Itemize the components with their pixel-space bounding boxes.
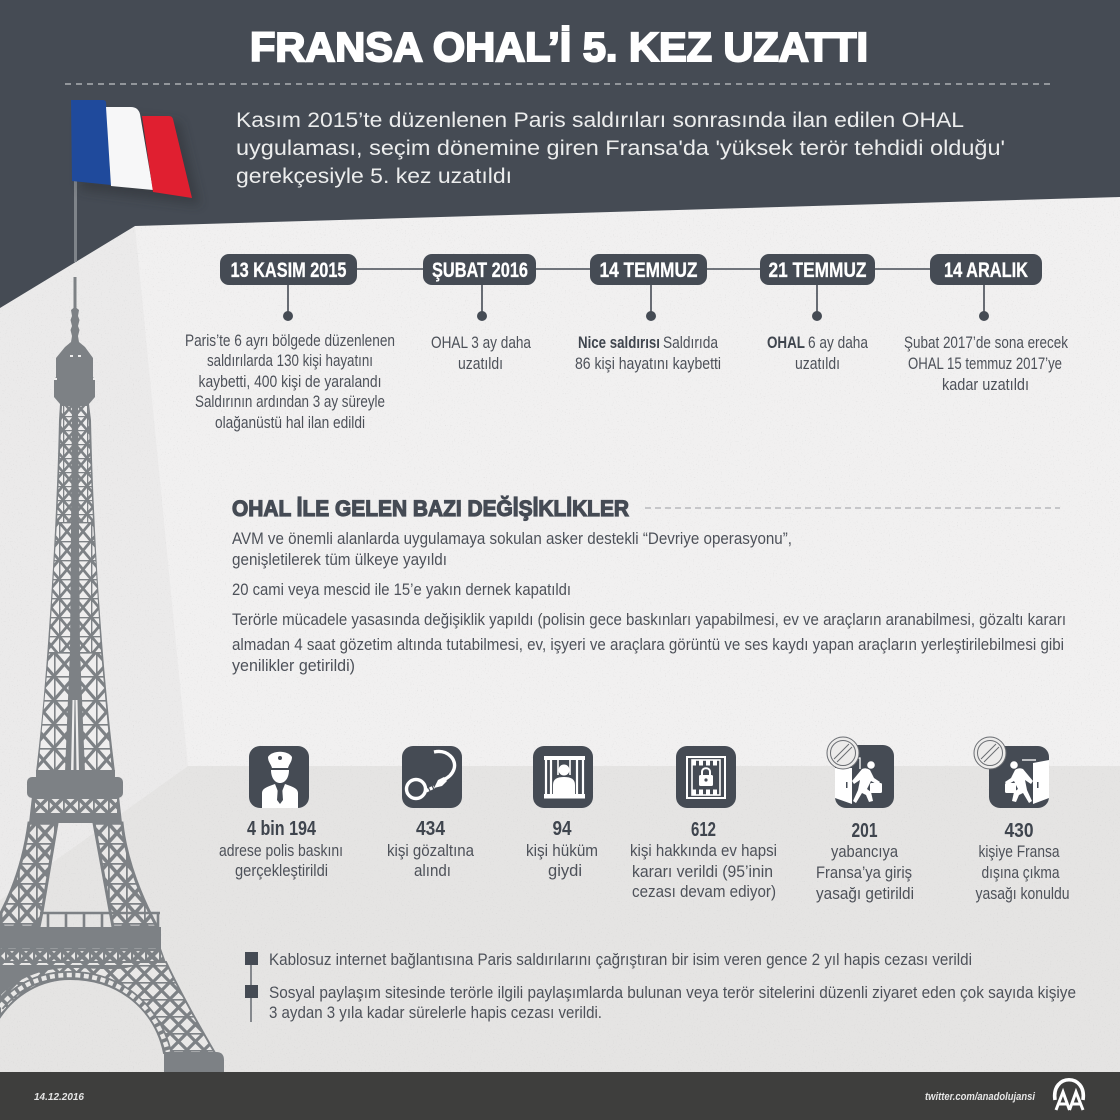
stat: entry ban	[816, 737, 914, 903]
changes text block: almadan 4 saat gözetim altında tutabilmesi, ev, işyeri ve araçlara görüntü ve ses kaydı yapan araçların yerleştirilebilmesi gibi	[232, 636, 1064, 654]
stat: detained: 434	[416, 818, 446, 840]
icon: person leaving door with ban sign	[974, 737, 1049, 808]
stat: police raids: 4 bin 194	[247, 818, 317, 840]
stat: police raids	[219, 746, 343, 880]
intro text: Kasım 2015’te düzenlenen Paris saldırıları sonrasında ilan edilen OHAL	[236, 109, 964, 132]
stat: house arrest: kişi hakkında ev hapsi	[630, 842, 777, 860]
stat: convicted: kişi hüküm	[526, 842, 598, 860]
stat: house arrest: 612	[691, 819, 716, 841]
stat: entry ban: 201	[852, 820, 878, 842]
bullet 2	[245, 984, 1076, 1022]
timeline item 5: kadar uzatıldı	[942, 376, 1029, 394]
changes text block	[232, 530, 1066, 675]
timeline item 5: Şubat 2017’de sona erecek	[904, 334, 1069, 352]
footer	[0, 1072, 1120, 1120]
first platform	[27, 777, 123, 798]
timeline item 4: 21 TEMMUZ	[768, 259, 867, 282]
timeline item 1: Saldırının ardından 3 ay süreyle	[195, 393, 385, 411]
changes text block: 20 cami veya mescid ile 15’e yakın dernek kapatıldı	[232, 581, 571, 599]
timeline item 2	[423, 254, 536, 373]
right leg	[94, 823, 157, 927]
stat: detained: kişi gözaltına	[387, 842, 475, 860]
stat: detained	[387, 746, 475, 880]
tower silhouette	[36, 277, 115, 772]
timeline item 3: Saldırıda	[663, 334, 719, 352]
footer twitter handle: twitter.com/anadolujansi	[925, 1091, 1036, 1103]
icon: French flag on pole	[71, 100, 200, 262]
changes text block: yenilikler getirildi)	[232, 657, 355, 675]
title: FRANSA OHAL’İ 5. KEZ UZATTI	[250, 24, 868, 70]
timeline item 1: Paris’te 6 ayrı bölgede düzenlenen	[185, 332, 395, 350]
changes text block: AVM ve önemli alanlarda uygulamaya sokulan asker destekli “Devriye operasyonu”,	[232, 530, 792, 548]
light windows in tower top	[54, 355, 96, 380]
timeline	[185, 254, 1069, 432]
bullet 2: Sosyal paylaşım sitesinde terörle ilgili paylaşımlarda bulunan veya terör sitelerini düzenli ziyaret eden çok sayıda kişiye	[269, 984, 1076, 1002]
stat: detained: alındı	[414, 862, 451, 880]
tower foot	[164, 1052, 224, 1072]
railing	[40, 913, 160, 927]
timeline item 2: uzatıldı	[458, 355, 503, 373]
changes text block: genişletilerek tüm ülkeye yayıldı	[232, 551, 447, 569]
timeline item 3: Nice saldırısı	[578, 334, 660, 352]
left leg	[1, 823, 57, 927]
stat: exit ban	[974, 737, 1070, 903]
icon: prisoner behind bars	[533, 746, 593, 808]
bullet list	[245, 951, 1076, 1022]
intro text: uygulaması, seçim dönemine giren Fransa'da 'yüksek terör tehdidi olduğu'	[236, 137, 1005, 160]
icon: handcuffs	[402, 746, 462, 808]
stat: convicted: giydi	[548, 862, 582, 880]
timeline item 5: OHAL 15 temmuz 2017’ye	[908, 355, 1062, 373]
timeline item 1	[185, 254, 395, 432]
stat: house arrest	[630, 746, 777, 901]
upper lattice	[38, 406, 112, 772]
Eiffel tower	[0, 277, 224, 1072]
lattice band below first platform	[29, 796, 122, 823]
intro text	[236, 109, 1005, 188]
bullet 2: 3 aydan 3 yıla kadar sürelerle hapis cezası verildi.	[269, 1004, 602, 1022]
stat: exit ban: yasağı konuldu	[976, 885, 1070, 903]
stat: exit ban: dışına çıkma	[982, 864, 1060, 882]
timeline item 1: 13 KASIM 2015	[230, 259, 347, 282]
timeline item 3	[575, 254, 721, 373]
section heading: changes: OHAL İLE GELEN BAZI DEĞİŞİKLİKLER	[232, 496, 629, 521]
timeline item 1: saldırılarda 130 kişi hayatını	[207, 352, 373, 370]
second platform	[0, 927, 161, 949]
icon: padlock in frame	[676, 746, 736, 808]
icon: police officer	[249, 746, 309, 808]
intro text: gerekçesiyle 5. kez uzatıldı	[236, 165, 512, 188]
bullet 1: Kablosuz internet bağlantısına Paris saldırılarını çağrıştıran bir isim veren gence 2 yıl hapis cezası verildi	[269, 951, 972, 969]
stat: house arrest: kararı verildi (95’inin	[632, 863, 773, 881]
stat: entry ban: yasağı getirildi	[816, 885, 914, 903]
stat: entry ban: yabancıya	[831, 843, 899, 861]
stat: exit ban: 430	[1004, 820, 1034, 842]
timeline item 1: olağanüstü hal ilan edildi	[215, 414, 365, 432]
stat: convicted	[526, 746, 598, 880]
stat: exit ban: kişiye Fransa	[978, 843, 1060, 861]
timeline item 4	[760, 254, 875, 373]
timeline item 3: 86 kişi hayatını kaybetti	[575, 355, 721, 373]
footer date: 14.12.2016	[34, 1092, 84, 1103]
icon: Anadolu Agency logo	[1055, 1080, 1083, 1110]
icon: person entering door with ban sign	[827, 737, 894, 808]
timeline item 5: 14 ARALIK	[944, 259, 1028, 282]
timeline item 1: kaybetti, 400 kişi de yaralandı	[198, 373, 382, 391]
timeline item 2: OHAL 3 ay daha	[431, 334, 532, 352]
timeline item 4: uzatıldı	[795, 355, 840, 373]
timeline item 4: OHAL	[767, 334, 805, 352]
stat: police raids: gerçekleştirildi	[235, 862, 328, 880]
stat: convicted: 94	[552, 818, 572, 840]
header panel	[0, 0, 1120, 308]
arch section	[0, 948, 215, 1053]
timeline item 4: 6 ay daha	[808, 334, 869, 352]
stat: entry ban: Fransa’ya giriş	[816, 864, 912, 882]
stat: police raids: adrese polis baskını	[219, 842, 343, 860]
stat: house arrest: cezası devam ediyor)	[632, 883, 776, 901]
timeline item 3: 14 TEMMUZ	[600, 259, 698, 282]
timeline item 2: ŞUBAT 2016	[432, 259, 528, 282]
timeline item 5	[904, 254, 1069, 394]
